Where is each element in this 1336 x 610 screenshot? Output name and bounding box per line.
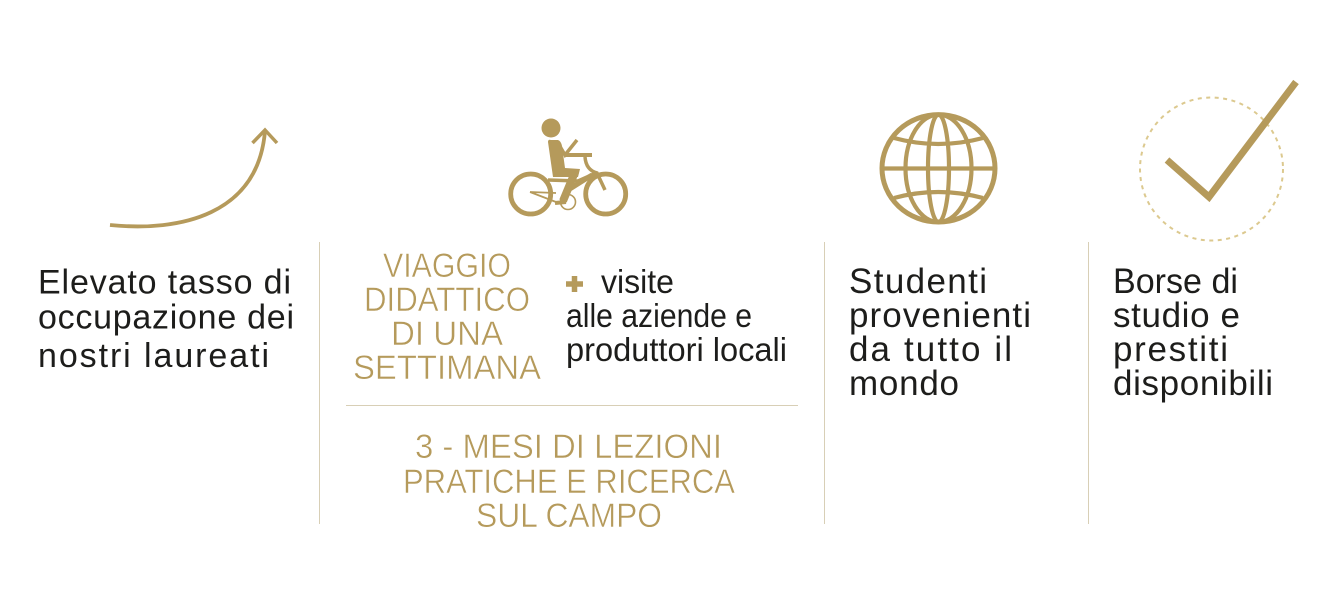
icon: rising arrow: [110, 130, 277, 226]
text: scholarships and loans: studio e: [1113, 296, 1240, 335]
icon: globe: [882, 115, 995, 222]
text: graduate employment: occupazione dei: [38, 298, 294, 336]
icon: bicycle with rider: [511, 118, 626, 214]
text: international students: da tutto il: [849, 330, 1012, 369]
heading: three months of practical lessons: 3 - MESI DI LEZIONI: [415, 428, 722, 466]
text: company and producer visits: alle aziende e: [566, 297, 752, 334]
text: company and producer visits: [566, 263, 787, 368]
heading: one-week study trip: VIAGGIO: [383, 247, 511, 285]
text: graduate employment: nostri laureati: [38, 337, 269, 375]
icon: plus: [566, 276, 583, 292]
heading: one-week study trip: [353, 247, 541, 387]
heading: three months of practical lessons: SUL CAMPO: [476, 497, 662, 535]
text: scholarships and loans: disponibili: [1113, 364, 1273, 403]
heading: three months of practical lessons: PRATICHE E RICERCA: [403, 463, 735, 501]
text: international students: mondo: [849, 364, 959, 403]
heading: three months of practical lessons: [403, 428, 735, 535]
text: company and producer visits: visite: [601, 263, 674, 300]
text: international students: [849, 262, 1031, 403]
text: scholarships and loans: prestiti: [1113, 330, 1228, 369]
text: graduate employment: Elevato tasso di: [38, 264, 291, 302]
heading: one-week study trip: DIDATTICO: [364, 281, 530, 319]
heading: one-week study trip: DI UNA: [391, 315, 503, 353]
icon: check mark in dashed circle: [1140, 82, 1296, 240]
text: international students: Studenti: [849, 262, 987, 301]
text: international students: provenienti: [849, 296, 1031, 335]
heading: one-week study trip: SETTIMANA: [353, 349, 541, 387]
text: scholarships and loans: Borse di: [1113, 262, 1238, 301]
text: graduate employment: [38, 264, 294, 375]
text: company and producer visits: produttori locali: [566, 331, 787, 368]
text: scholarships and loans: [1113, 262, 1273, 403]
